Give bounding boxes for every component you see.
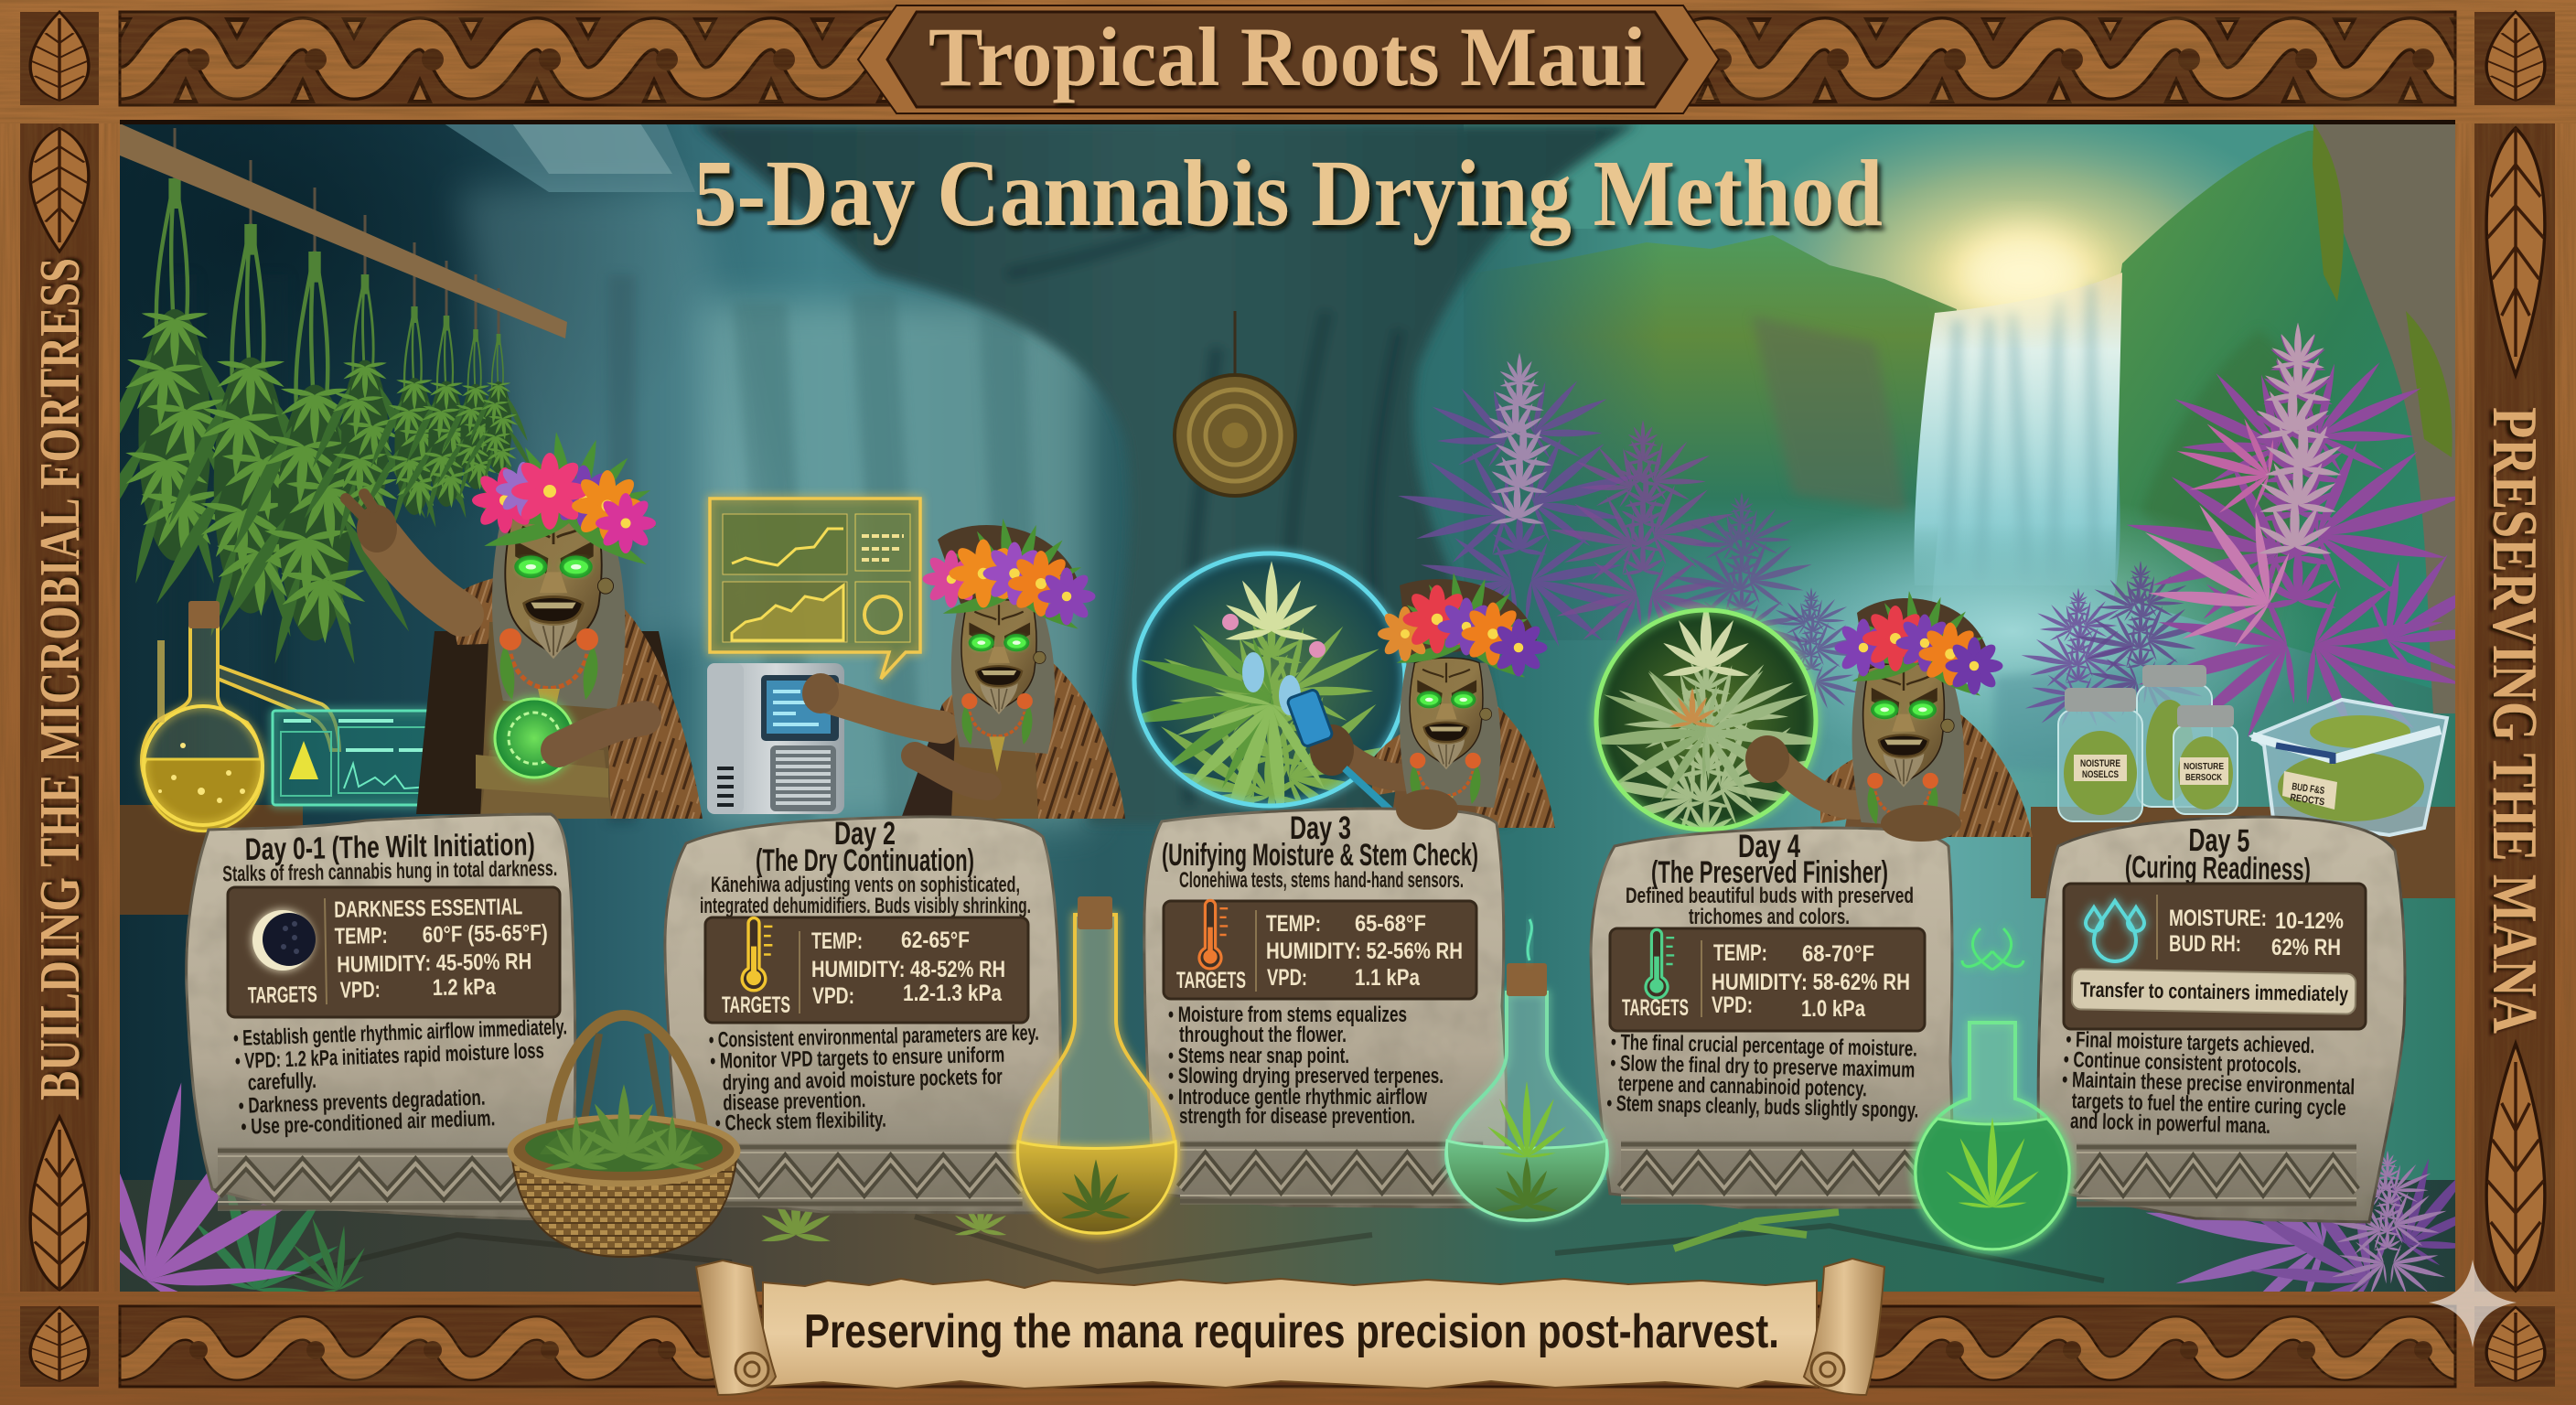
- icon: thermometer green: [1646, 929, 1674, 998]
- storage jars and container: [2058, 665, 2447, 835]
- scroll banner: [696, 1259, 1884, 1395]
- callout: transfer to containers: [2072, 969, 2356, 1014]
- drying rod: [120, 123, 567, 338]
- bullet notes: • Establish gentle rhythmic airflow immediately.: [233, 1014, 567, 1051]
- bullet notes: [2061, 1027, 2356, 1141]
- targets data: MOISTURE:: [2169, 906, 2267, 931]
- bullet notes: terpene and cannabinoid potency.: [1618, 1071, 1867, 1101]
- bullet notes: and lock in powerful mana.: [2070, 1109, 2270, 1139]
- carved band: [218, 1147, 557, 1211]
- targets data: VPD:: [812, 983, 854, 1009]
- targets panel: [705, 917, 1028, 1023]
- heading: (Curing Readiness): [2125, 850, 2311, 887]
- panel: day 4 stone: [1591, 828, 1952, 1207]
- heading: (The Dry Continuation): [756, 843, 974, 878]
- targets data: TARGETS: [1622, 995, 1689, 1021]
- waterfall mist and pool: [1747, 514, 2296, 763]
- targets data: TEMP:: [1266, 911, 1321, 937]
- targets data: 1.0 kPa: [1801, 996, 1866, 1022]
- plaque: title inset: [887, 12, 1687, 107]
- circle: finished bud: [1572, 602, 1841, 949]
- heading: Kānehiwa adjusting vents on sophisticated,: [711, 873, 1020, 897]
- bullet notes: • Darkness prevents degradation.: [238, 1086, 486, 1119]
- bullet notes: [1168, 1003, 1444, 1129]
- targets panel: [2064, 884, 2366, 1029]
- hanging cannabis bunches: [76, 128, 534, 665]
- bullet notes: [709, 1021, 1041, 1136]
- bullet notes: • Slow the final dry to preserve maximum: [1610, 1051, 1916, 1083]
- bullet notes: carefully.: [247, 1068, 317, 1096]
- panel: day 3 stone: [1144, 809, 1507, 1207]
- heading: integrated dehumidifiers. Buds visibly shrinking.: [700, 894, 1031, 918]
- side banner: left: BUILDING THE MICROBIAL FORTRESS: [29, 258, 91, 1100]
- dark corner of drying room: [120, 124, 637, 456]
- carved band: [1621, 1141, 1930, 1205]
- bullet notes: • Introduce gentle rhythmic airflow: [1168, 1085, 1427, 1110]
- bullet notes: • Final moisture targets achieved.: [2066, 1027, 2315, 1058]
- targets data: HUMIDITY: 58-62% RH: [1712, 970, 1910, 995]
- character 2: tiki elder: [802, 518, 1125, 819]
- bullet notes: drying and avoid moisture pockets for: [723, 1065, 1003, 1096]
- targets data: VPD:: [340, 977, 381, 1003]
- targets data: TEMP:: [811, 928, 863, 954]
- bullet notes: [233, 1014, 571, 1140]
- carved band: [1180, 1141, 1483, 1205]
- jar: moisture front: BERSOCK: [2185, 773, 2223, 783]
- heading: Day 0-1 (The Wilt Initiation): [244, 827, 535, 867]
- bullet notes: • Slowing drying preserved terpenes.: [1168, 1064, 1444, 1089]
- waterfall: [1914, 229, 2122, 585]
- hologram: data charts: [710, 499, 920, 679]
- targets data: DARKNESS ESSENTIAL: [334, 894, 522, 923]
- heading: Day 3: [1290, 810, 1351, 846]
- container: buds: [2252, 700, 2447, 835]
- bullet notes: throughout the flower.: [1179, 1023, 1347, 1047]
- woven basket: [510, 1015, 737, 1257]
- targets data: [246, 894, 549, 1009]
- heading: Day 5: [2188, 822, 2250, 859]
- foreground leaves left: [38, 1013, 387, 1359]
- bullet notes: • Continue consistent protocols.: [2063, 1047, 2302, 1078]
- stone slab: [1591, 828, 1952, 1207]
- container: buds: BUD F&S: [2292, 781, 2325, 797]
- floor: [120, 1180, 2455, 1292]
- stone slab: [665, 817, 1060, 1213]
- targets panel: [1610, 928, 1925, 1031]
- cliff tree with moss: [2313, 123, 2455, 713]
- container: buds: REOCTS: [2290, 792, 2325, 808]
- heading: [2125, 821, 2312, 887]
- watermark star: [2429, 1260, 2517, 1347]
- bullet notes: • Use pre-conditioned air medium.: [241, 1106, 496, 1140]
- callout: transfer to containers: Transfer to containers immediately: [2080, 977, 2348, 1006]
- targets data: 60°F (55-65°F): [422, 920, 548, 948]
- targets data: [1622, 940, 1910, 1022]
- bullet notes: • Maintain these precise environmental: [2062, 1067, 2355, 1099]
- targets data: [2157, 895, 2344, 960]
- small buds and stems on floor: [760, 1182, 1839, 1249]
- targets data: 65-68°F: [1355, 911, 1426, 937]
- heading: [1162, 810, 1478, 893]
- bullet notes: • Consistent environmental parameters are key.: [709, 1021, 1039, 1053]
- jar: moisture left: NOISTURE: [2080, 758, 2120, 769]
- targets data: TARGETS: [722, 992, 790, 1018]
- character 3: tiki elder: [1286, 572, 1555, 831]
- flask: green with leaf: [1446, 919, 1607, 1220]
- heading: Clonehiwa tests, stems hand-hand sensors.: [1179, 868, 1464, 893]
- flask: gold distiller: [142, 601, 339, 831]
- jar: moisture front: [2174, 705, 2238, 814]
- bullet notes: • Stem snaps cleanly, buds slightly spongy.: [1606, 1091, 1919, 1123]
- bullet notes: • The final crucial percentage of moisture.: [1611, 1030, 1917, 1062]
- targets data: HUMIDITY: 45-50% RH: [337, 949, 531, 978]
- icon: thermometer yellow: [742, 918, 772, 991]
- heading: Day 2: [834, 816, 896, 852]
- targets data: 10-12%: [2275, 908, 2344, 934]
- dehumidifier machine: [707, 663, 844, 814]
- jar: moisture front: NOISTURE: [2184, 762, 2224, 772]
- targets data: VPD:: [1267, 965, 1307, 991]
- panel: day 0-1 stone: [187, 814, 575, 1220]
- heading: [221, 827, 557, 886]
- bullet notes: targets to fuel the entire curing cycle: [2071, 1089, 2346, 1121]
- targets data: TARGETS: [248, 981, 317, 1009]
- targets data: TARGETS: [1176, 968, 1246, 993]
- targets data: HUMIDITY: 52-56% RH: [1266, 938, 1463, 964]
- icon: thermometer orange: [1199, 900, 1228, 969]
- targets data: 1.1 kPa: [1355, 965, 1421, 991]
- character 1: tiki elder: [346, 431, 703, 819]
- targets data: 62-65°F: [901, 928, 970, 953]
- right wooden shelf: [2031, 807, 2455, 898]
- scroll right roll: [1804, 1259, 1884, 1395]
- sky and sun: [1464, 124, 2313, 311]
- hands resting on stones: [1396, 789, 1961, 842]
- carved band: [2077, 1143, 2356, 1207]
- misty forest opening: [609, 276, 1105, 840]
- plaque: title background: [858, 5, 1719, 113]
- left wooden shelf: [120, 805, 303, 915]
- great tree trunk: [695, 123, 1637, 823]
- panel: day 5 stone: [2038, 817, 2405, 1222]
- bullet notes: • Stems near snap point.: [1168, 1044, 1349, 1068]
- hanging woven disc: [1175, 311, 1295, 496]
- heading: [1626, 829, 1914, 929]
- background wash: [120, 123, 2455, 1292]
- skylight and light rays: [445, 124, 756, 648]
- bullet notes: • Moisture from stems equalizes: [1168, 1003, 1407, 1027]
- targets data: HUMIDITY: 48-52% RH: [811, 957, 1005, 982]
- bullet notes: [1606, 1030, 1920, 1123]
- targets data: 62% RH: [2271, 935, 2341, 960]
- heading: Defined beautiful buds with preserved: [1626, 884, 1914, 908]
- targets data: 1.2 kPa: [432, 974, 497, 1001]
- stone slab: [1144, 809, 1507, 1207]
- targets panel: [1164, 901, 1476, 999]
- stone slab: [2038, 817, 2405, 1222]
- targets data: TEMP:: [1713, 940, 1767, 966]
- targets panel: [228, 887, 560, 1017]
- big pink cannabis plant: [2107, 323, 2528, 765]
- character 4: tiki elder: [1745, 590, 2033, 852]
- hologram: lab panel: [273, 711, 445, 805]
- jar: moisture left: NOSELCS: [2082, 769, 2119, 780]
- panel: day 2 stone: [665, 816, 1060, 1213]
- scroll caption: Preserving the mana requires precision post-harvest.: [804, 1305, 1779, 1358]
- jar: moisture back: [2137, 665, 2212, 807]
- side banner: right: PRESERVING THE MANA: [2479, 407, 2549, 1034]
- heading: trichomes and colors.: [1689, 905, 1850, 929]
- targets data: [722, 928, 1005, 1018]
- icon: moon: [252, 910, 316, 971]
- scroll left roll: [696, 1260, 776, 1395]
- circle: magnified flower: [1097, 553, 1438, 978]
- title: main heading: 5-Day Cannabis Drying Method: [693, 141, 1883, 246]
- heading: (Unifying Moisture & Stem Check): [1162, 838, 1478, 873]
- jar: moisture left: [2058, 688, 2142, 821]
- targets data: 68-70°F: [1802, 941, 1874, 967]
- carved band: [706, 1143, 1023, 1207]
- targets data: VPD:: [1712, 992, 1753, 1018]
- targets data: TEMP:: [334, 923, 388, 949]
- bullet notes: • VPD: 1.2 kPa initiates rapid moisture loss: [235, 1038, 544, 1074]
- heading: Day 4: [1738, 829, 1800, 864]
- purple bud foreground right: [2129, 1117, 2517, 1348]
- title: brand: Tropical Roots Maui: [928, 10, 1646, 103]
- bullet notes: strength for disease prevention.: [1179, 1104, 1415, 1129]
- targets data: [1176, 910, 1463, 993]
- targets data: 1.2-1.3 kPa: [903, 981, 1003, 1006]
- heading: (The Preserved Finisher): [1651, 855, 1888, 890]
- scene: background illustration: [120, 124, 2455, 1292]
- icon: water drops: [2086, 901, 2144, 961]
- bullet notes: disease prevention.: [723, 1088, 866, 1116]
- mountains: [1464, 123, 2455, 695]
- heading: [700, 816, 1031, 918]
- flask: yellow with buds: [1018, 896, 1175, 1233]
- purple cannabis plants, background: [1388, 353, 2212, 735]
- heading: Stalks of fresh cannabis hung in total darkness.: [222, 856, 557, 886]
- bullet notes: • Check stem flexibility.: [715, 1108, 886, 1136]
- stone slab: [187, 814, 575, 1220]
- flask: glowing green with leaf: [1916, 928, 2069, 1249]
- bullet notes: • Monitor VPD targets to ensure uniform: [710, 1043, 1005, 1074]
- targets data: BUD RH:: [2169, 931, 2241, 957]
